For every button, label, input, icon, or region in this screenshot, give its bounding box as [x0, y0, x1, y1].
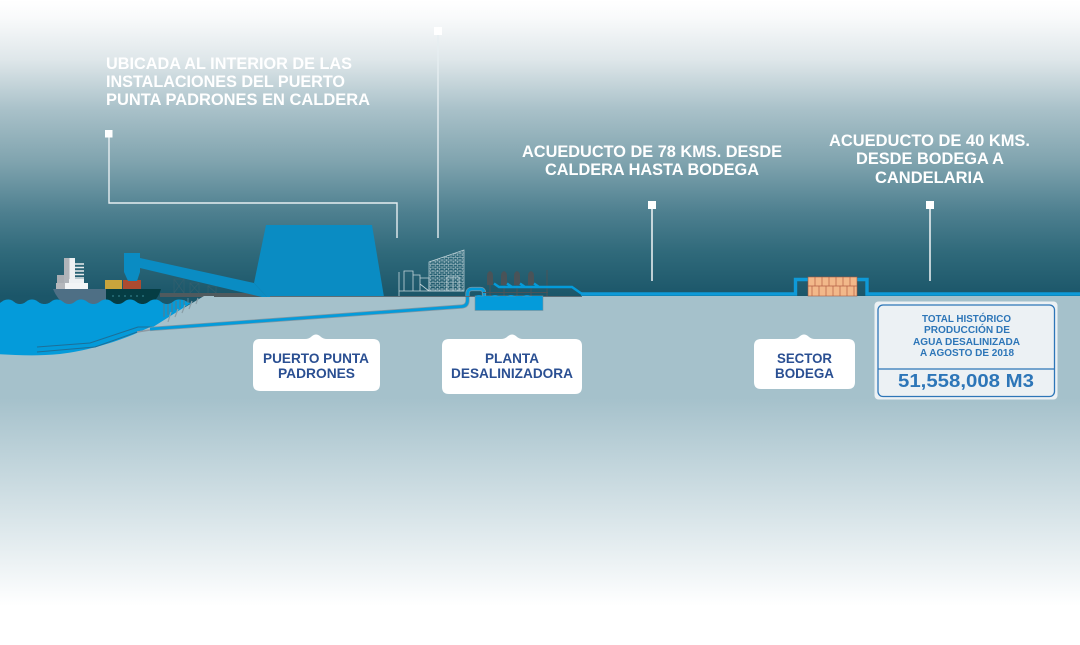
text: aqueduct 40 km: CANDELARIA — [875, 169, 984, 187]
connector line: aqueduct 40 km — [926, 201, 934, 281]
label: puerto punta padrones: PUERTO PUNTA — [263, 350, 369, 366]
callout: total production: TOTAL HISTÓRICO — [922, 312, 1011, 325]
sea water — [0, 300, 191, 355]
label: planta desalinizadora — [442, 334, 582, 394]
connector line: aqueduct 78 km — [648, 201, 656, 281]
tank — [475, 295, 543, 310]
text: aqueduct 78 km — [522, 143, 782, 179]
ship — [53, 258, 161, 306]
text: aqueduct 40 km: DESDE BODEGA A — [856, 150, 1004, 168]
callout: total production: PRODUCCIÓN DE — [924, 323, 1010, 336]
callout: total production — [874, 302, 1058, 400]
pier pilings — [164, 298, 188, 317]
text: aqueduct 40 km — [829, 132, 1030, 187]
heading: location text: INSTALACIONES DEL PUERTO — [106, 73, 345, 91]
text: aqueduct 78 km: CALDERA HASTA BODEGA — [545, 161, 759, 179]
aqueduct pipe — [581, 280, 1080, 294]
treated water branches — [494, 284, 582, 294]
label: puerto punta padrones: PADRONES — [278, 365, 355, 381]
callout: total production: 51,558,008 M3 — [898, 370, 1034, 391]
sea backdrop — [0, 296, 204, 308]
heading: location text: PUNTA PADRONES EN CALDERA — [106, 91, 370, 109]
industrial building — [399, 250, 464, 296]
heading: location text — [106, 55, 370, 109]
connector line: top pole — [434, 27, 442, 238]
text: aqueduct 40 km: ACUEDUCTO DE 40 KMS. — [829, 132, 1030, 150]
hull — [53, 289, 106, 306]
brick building: sector bodega — [808, 277, 857, 296]
shore hatching — [168, 298, 198, 322]
ground line — [270, 296, 582, 298]
connector line: port location — [105, 130, 397, 238]
heading: location text: UBICADA AL INTERIOR DE LAS — [106, 55, 352, 73]
port silo — [254, 225, 384, 297]
label: puerto punta padrones — [253, 334, 380, 391]
label: sector bodega — [754, 334, 855, 389]
shore slope — [150, 296, 214, 328]
label: planta desalinizadora: DESALINIZADORA — [451, 365, 573, 381]
sea intake pipe — [37, 289, 484, 352]
callout: total production: A AGOSTO DE 2018 — [920, 347, 1014, 359]
label: sector bodega: BODEGA — [775, 365, 834, 381]
label: sector bodega: SECTOR — [777, 350, 832, 366]
superstructure — [56, 258, 88, 289]
dock with trusses — [160, 279, 272, 297]
membrane units — [487, 271, 534, 285]
text: aqueduct 78 km: ACUEDUCTO DE 78 KMS. DESDE — [522, 143, 782, 161]
desalination plant — [475, 270, 582, 310]
callout: total production: AGUA DESALINIZADA — [913, 336, 1020, 348]
background ground — [0, 296, 1080, 606]
background sky gradient — [0, 0, 1080, 296]
label: planta desalinizadora: PLANTA — [485, 350, 539, 366]
containers — [105, 280, 122, 289]
conveyor and hopper — [124, 253, 267, 297]
